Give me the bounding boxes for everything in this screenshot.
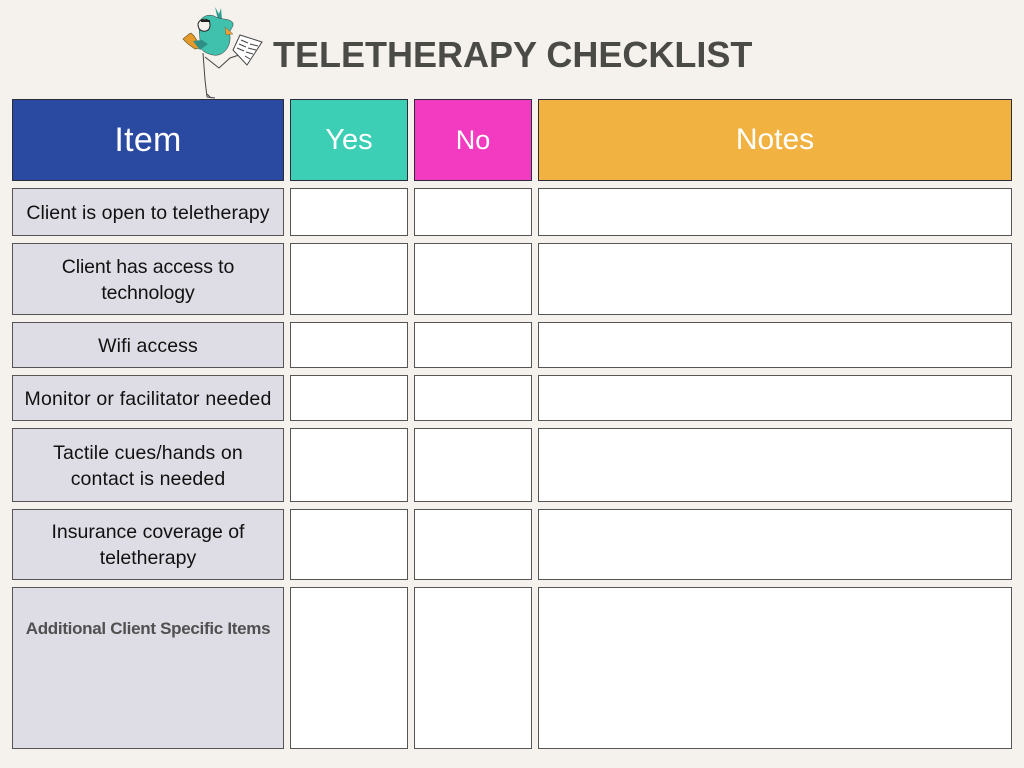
notes cell row 1 — [538, 188, 1012, 236]
yes cell row 2 — [290, 243, 408, 315]
yes cell row 1 — [290, 188, 408, 236]
icon: bird reading — [182, 7, 263, 98]
no cell row 1 — [414, 188, 532, 236]
no cell row 5 — [414, 428, 532, 502]
item: tactile cues: contact is needed — [71, 468, 225, 490]
no cell row 4 — [414, 375, 532, 421]
item: insurance: teletherapy — [100, 547, 196, 569]
item: additional items — [12, 587, 284, 749]
no cell row 2 — [414, 243, 532, 315]
table header: No — [414, 99, 532, 181]
yes cell row 5 — [290, 428, 408, 502]
notes cell row 7 — [538, 587, 1012, 749]
yes cell row 6 — [290, 509, 408, 580]
table header: Item — [12, 99, 284, 181]
table header: No: No — [456, 124, 490, 154]
item: insurance — [12, 509, 284, 580]
item: wifi — [12, 322, 284, 368]
notes cell row 2 — [538, 243, 1012, 315]
yes cell row 3 — [290, 322, 408, 368]
item: technology access: technology — [101, 282, 195, 304]
item: client open: Client is open to teletherapy — [26, 202, 270, 224]
item: monitor — [12, 375, 284, 421]
item: technology access: Client has access to — [62, 256, 234, 278]
table header: Yes: Yes — [325, 124, 373, 156]
item: client open — [12, 188, 284, 236]
table header: Yes — [290, 99, 408, 181]
no cell row 3 — [414, 322, 532, 368]
item: monitor: Monitor or facilitator needed — [25, 388, 271, 410]
item: additional items: Additional Client Specific Items — [26, 619, 270, 638]
title: TELETHERAPY CHECKLIST — [273, 34, 752, 75]
item: tactile cues — [12, 428, 284, 502]
yes cell row 4 — [290, 375, 408, 421]
no cell row 6 — [414, 509, 532, 580]
item: technology access — [12, 243, 284, 315]
item: wifi: Wifi access — [98, 334, 198, 356]
notes cell row 6 — [538, 509, 1012, 580]
table header: Item: Item — [114, 120, 182, 158]
table header: Notes — [538, 99, 1012, 181]
notes cell row 3 — [538, 322, 1012, 368]
notes cell row 5 — [538, 428, 1012, 502]
yes cell row 7 — [290, 587, 408, 749]
notes cell row 4 — [538, 375, 1012, 421]
item: tactile cues: Tactile cues/hands on — [53, 442, 243, 464]
table header: Notes: Notes — [736, 123, 814, 156]
item: insurance: Insurance coverage of — [52, 521, 244, 543]
no cell row 7 — [414, 587, 532, 749]
